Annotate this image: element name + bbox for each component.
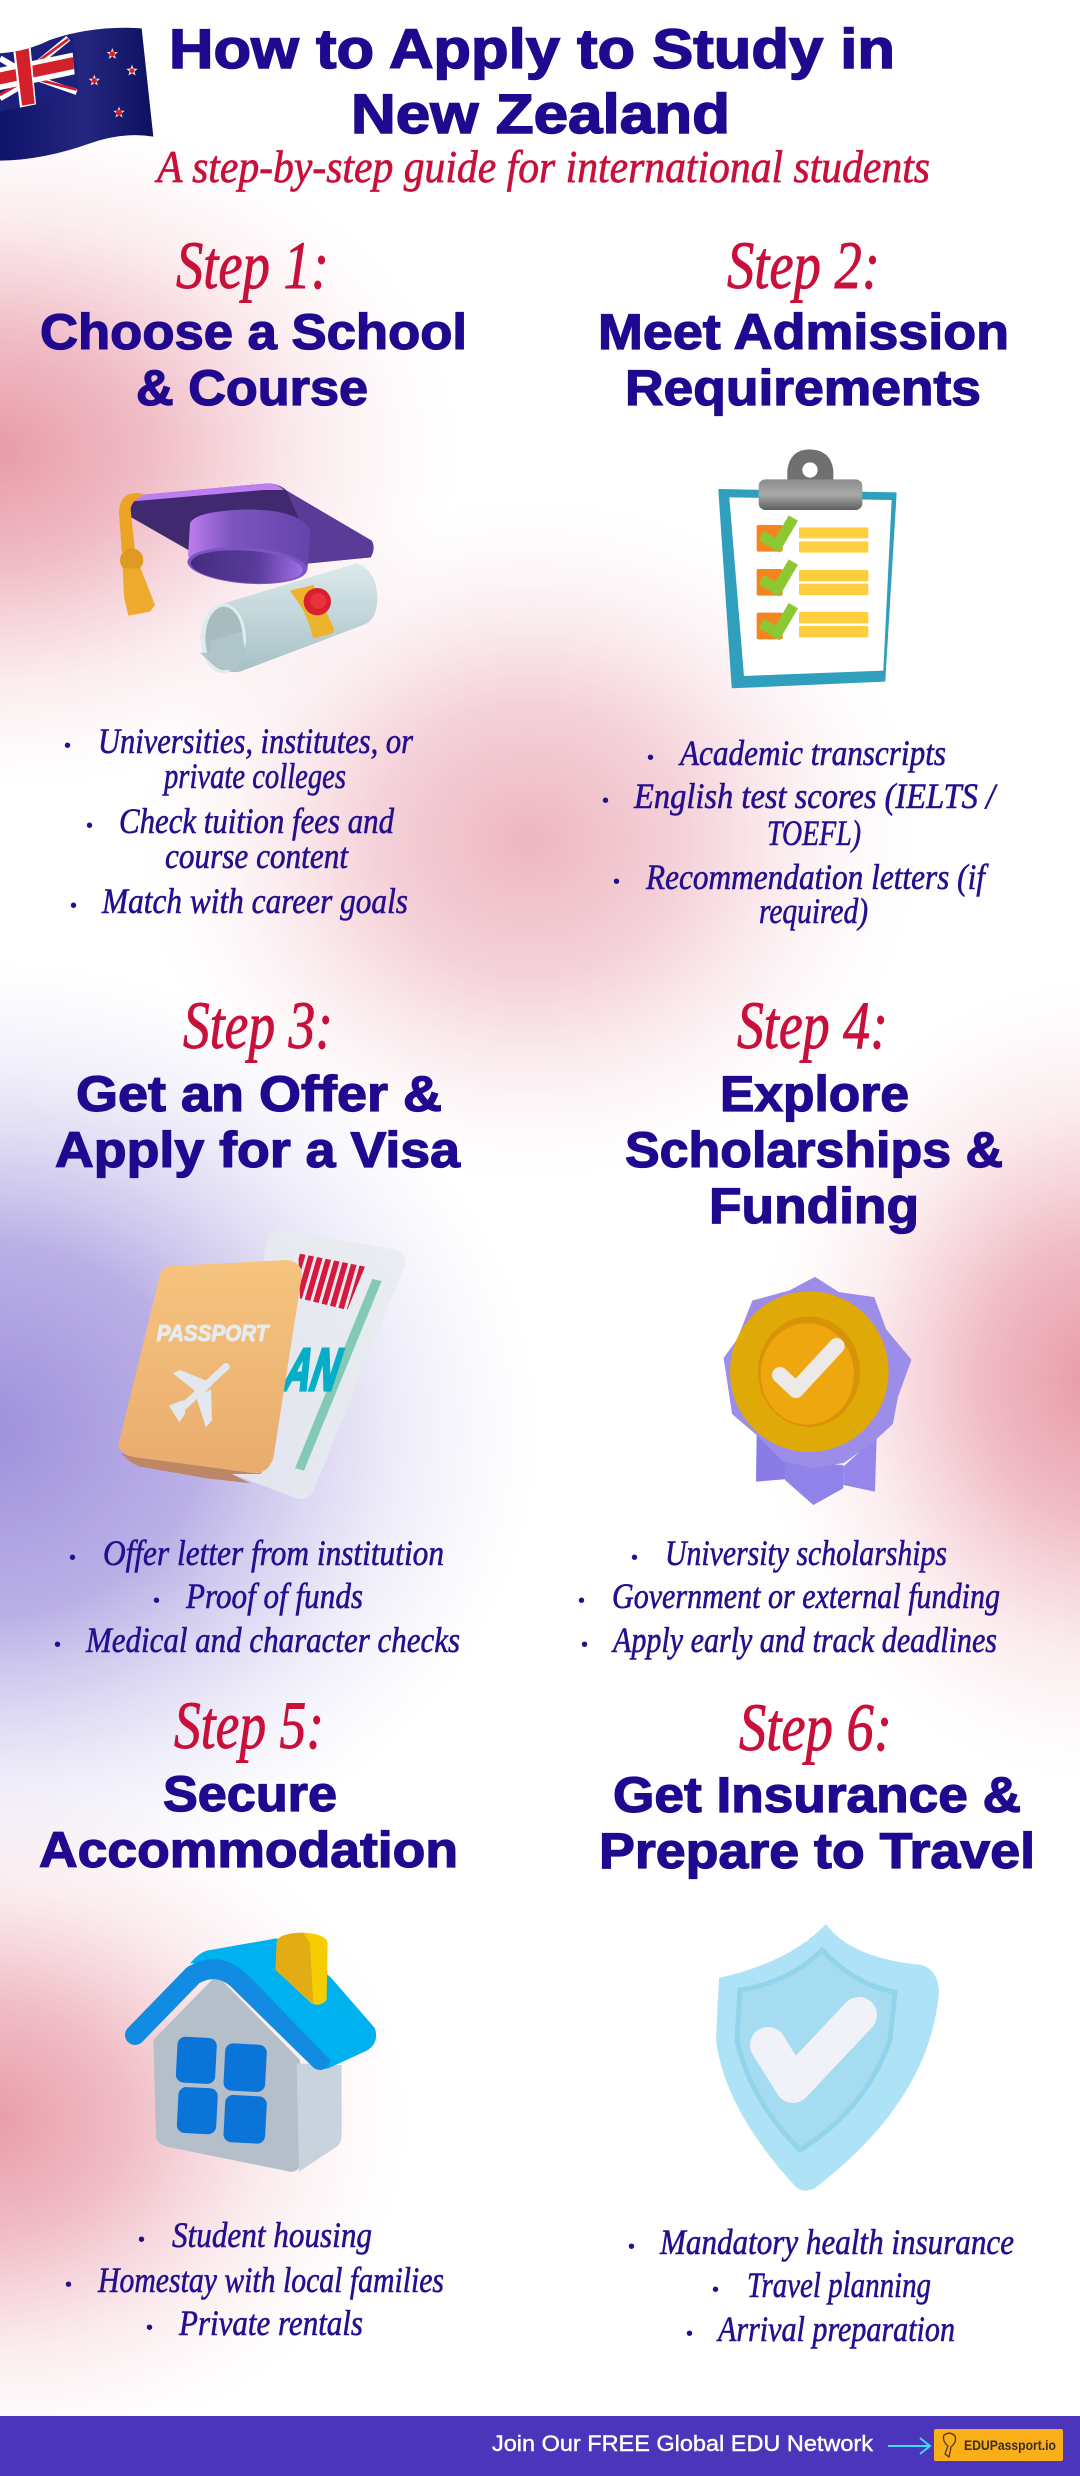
bullet list: course content bbox=[165, 836, 349, 876]
bullet list: • bbox=[647, 747, 654, 769]
bullet list: required) bbox=[759, 891, 868, 931]
panel: step 4 bbox=[578, 987, 1003, 1660]
bullet list bbox=[578, 1533, 1000, 1660]
bullet list: Proof of funds bbox=[185, 1576, 363, 1616]
panel: step 6 bbox=[599, 1689, 1035, 2349]
bullet list: Homestay with local families bbox=[97, 2260, 444, 2300]
heading: Get an Offer & bbox=[76, 1066, 442, 1122]
bullet list: Arrival preparation bbox=[716, 2309, 955, 2349]
bullet list: • bbox=[578, 1590, 585, 1612]
bullet list bbox=[64, 721, 414, 921]
heading: Accommodation bbox=[39, 1822, 458, 1878]
step label: Step 2: bbox=[727, 227, 880, 303]
bullet list: • bbox=[686, 2323, 693, 2345]
bullet list: private colleges bbox=[162, 756, 346, 796]
bullet list: • bbox=[146, 2317, 153, 2339]
footer bar bbox=[0, 2416, 1080, 2476]
arrow bbox=[888, 2438, 930, 2454]
icon: passport and boarding pass: AN bbox=[276, 1336, 351, 1403]
title bbox=[169, 17, 895, 145]
bullet list: • bbox=[153, 1590, 160, 1612]
bullet list bbox=[602, 733, 998, 931]
panel: step 3 bbox=[54, 987, 461, 1660]
bullet list: Mandatory health insurance bbox=[659, 2222, 1014, 2262]
heading bbox=[39, 1766, 458, 1878]
heading bbox=[598, 304, 1009, 416]
bullet list: • bbox=[70, 895, 77, 917]
heading: Get Insurance & bbox=[613, 1767, 1021, 1823]
heading: Funding bbox=[709, 1178, 919, 1234]
heading bbox=[40, 304, 467, 416]
bullet list: • bbox=[86, 815, 93, 837]
icon: house bbox=[135, 1933, 376, 2172]
bullet list bbox=[628, 2222, 1014, 2349]
bullet list: University scholarships bbox=[665, 1533, 947, 1573]
heading: Explore bbox=[720, 1066, 909, 1122]
bullet list: • bbox=[54, 1634, 61, 1656]
bullet list: Private rentals bbox=[178, 2303, 363, 2343]
step label: Step 3: bbox=[183, 987, 333, 1063]
heading: Meet Admission bbox=[598, 304, 1009, 360]
bullet list: • bbox=[65, 2274, 72, 2296]
step label: Step 1: bbox=[176, 227, 329, 303]
icon: graduation cap and diploma bbox=[119, 483, 377, 673]
bullet list: Apply early and track deadlines bbox=[611, 1620, 997, 1660]
logo badge: EDUPassport.io bbox=[964, 2437, 1056, 2453]
bullet list: Check tuition fees and bbox=[119, 801, 395, 841]
bullet list bbox=[54, 1533, 460, 1660]
step label: Step 6: bbox=[739, 1689, 892, 1765]
bullet list: Government or external funding bbox=[612, 1576, 1000, 1616]
title: How to Apply to Study in bbox=[169, 17, 895, 80]
heading bbox=[599, 1767, 1035, 1879]
panel: step 2 bbox=[598, 227, 1009, 931]
subtitle: A step-by-step guide for international students bbox=[154, 141, 930, 192]
bullet list: • bbox=[602, 790, 609, 812]
heading: Scholarships & bbox=[625, 1122, 1003, 1178]
bullet list: Offer letter from institution bbox=[103, 1533, 444, 1573]
heading bbox=[55, 1066, 461, 1178]
bullet list: Student housing bbox=[172, 2215, 372, 2255]
heading: Requirements bbox=[625, 360, 981, 416]
heading: Apply for a Visa bbox=[55, 1122, 461, 1178]
step label: Step 5: bbox=[174, 1687, 324, 1763]
panel: step 1 bbox=[40, 227, 467, 921]
bullet list: • bbox=[64, 735, 71, 757]
logo badge bbox=[934, 2429, 1063, 2461]
bullet list: • bbox=[613, 871, 620, 893]
heading: Choose a School bbox=[40, 304, 467, 360]
icon: clipboard checklist bbox=[719, 449, 896, 687]
bullet list: English test scores (IELTS / bbox=[633, 776, 998, 816]
bullet list: Universities, institutes, or bbox=[98, 721, 414, 761]
bullet list: • bbox=[69, 1547, 76, 1569]
icon: passport and boarding pass: PASSPORT bbox=[157, 1320, 270, 1346]
bullet list bbox=[65, 2215, 444, 2343]
bullet list: Travel planning bbox=[747, 2265, 931, 2305]
icon: gold medal with check bbox=[725, 1278, 910, 1505]
bullet list: • bbox=[628, 2236, 635, 2258]
bullet list: • bbox=[712, 2279, 719, 2301]
icon: New Zealand flag bbox=[0, 28, 153, 161]
heading: & Course bbox=[136, 360, 368, 416]
heading: Secure bbox=[163, 1766, 337, 1822]
bullet list: • bbox=[138, 2229, 145, 2251]
title: New Zealand bbox=[351, 82, 730, 145]
bullet list: Match with career goals bbox=[101, 881, 408, 921]
footer call to action: Join Our FREE Global EDU Network bbox=[492, 2431, 874, 2456]
panel: step 5 bbox=[39, 1687, 458, 2343]
icon: passport and boarding pass bbox=[118, 1229, 405, 1499]
bullet list: • bbox=[581, 1634, 588, 1656]
step label: Step 4: bbox=[737, 987, 888, 1063]
icon: shield with check bbox=[716, 1924, 939, 2191]
bullet list: Academic transcripts bbox=[678, 733, 946, 773]
bullet list: Medical and character checks bbox=[85, 1620, 460, 1660]
heading: Prepare to Travel bbox=[599, 1823, 1035, 1879]
heading bbox=[625, 1066, 1003, 1234]
bullet list: Recommendation letters (if bbox=[645, 857, 989, 897]
bullet list: TOEFL) bbox=[767, 813, 861, 853]
bullet list: • bbox=[631, 1547, 638, 1569]
